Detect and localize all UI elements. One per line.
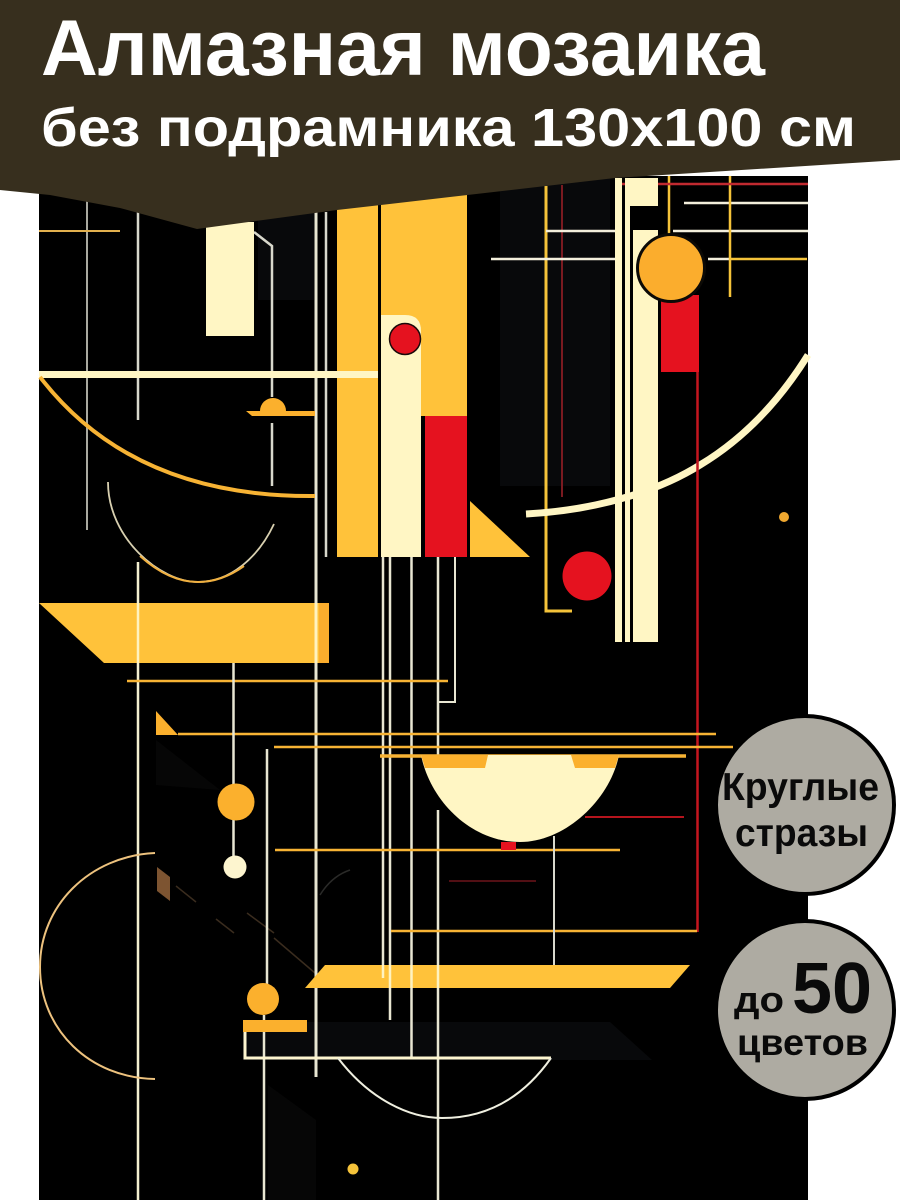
poster black background — [39, 176, 808, 1200]
badge text: до — [734, 979, 784, 1020]
badge: round rhinestones — [716, 716, 894, 894]
badge text: цветов — [737, 1022, 868, 1063]
pendulum line — [232, 663, 235, 860]
overlay verticals across parallelogram — [138, 603, 316, 663]
overlay verticals across bar — [383, 965, 438, 988]
red rectangle — [425, 416, 467, 557]
black divider — [378, 200, 381, 557]
gold line top left — [39, 230, 120, 232]
yellow bottom bar — [305, 965, 690, 988]
gold column right — [381, 195, 467, 416]
thin arc — [108, 482, 274, 582]
dark red thin line — [449, 880, 536, 882]
gold horizontal lines — [127, 681, 733, 931]
yellow line pieces top right — [669, 176, 807, 297]
verticals under the central block — [383, 557, 455, 1200]
header banner — [0, 0, 900, 229]
small red block — [501, 842, 516, 850]
bowl orange trapezoids — [421, 755, 619, 768]
red line behind bowl — [585, 816, 684, 818]
vertical line at lower circle — [264, 749, 267, 1200]
gold triangle — [470, 501, 530, 557]
gold column left — [337, 205, 378, 557]
badge text: стразы — [735, 812, 868, 855]
gold sweeping arc — [40, 377, 315, 496]
faint diagonal lines and brown fragments — [157, 867, 350, 973]
title — [41, 3, 856, 158]
title line 2: без подрамника 130х100 см — [41, 98, 856, 158]
cream long bar — [39, 371, 378, 378]
cream bowl — [421, 755, 619, 842]
dark red line — [561, 185, 563, 497]
thin vertical lines left — [87, 176, 326, 1200]
thin semicircle — [338, 1058, 551, 1118]
red line top — [617, 183, 808, 185]
gold L-shaped line — [546, 186, 572, 611]
cream vertical strips — [615, 178, 658, 642]
cream bracket line — [245, 1032, 551, 1058]
badge text — [722, 766, 879, 855]
thin vertical to bar — [553, 836, 555, 965]
badge text: 50 — [792, 949, 872, 1029]
badge circle — [716, 921, 894, 1099]
horizontal lines top right — [491, 203, 808, 259]
gold parallelogram — [39, 603, 329, 663]
badge: up to 50 colours — [716, 921, 894, 1099]
red circle — [390, 324, 420, 354]
red circle lower — [562, 552, 612, 600]
cream rectangle — [206, 222, 254, 336]
orange circle — [638, 234, 704, 302]
badge text — [734, 949, 872, 1063]
red long line — [696, 372, 699, 932]
badge circle — [716, 716, 894, 894]
orange small bar — [243, 1020, 307, 1032]
lower orange circle — [247, 983, 279, 1015]
cream arc right — [526, 355, 808, 514]
dome on strip — [246, 398, 315, 416]
badge text: Круглые — [722, 766, 879, 809]
orange edge — [319, 603, 329, 663]
title line 1: Алмазная мозаика — [41, 3, 766, 92]
thin gold circle arc — [40, 853, 155, 1079]
gold arc segment — [140, 556, 244, 582]
subtle dark panels — [156, 176, 652, 1200]
small yellow dot — [348, 1164, 358, 1174]
orange dot — [779, 512, 789, 522]
pendulum circles — [218, 784, 254, 878]
poster artwork — [39, 176, 808, 1200]
red block right — [661, 295, 699, 372]
cream central column — [381, 315, 421, 557]
small gold triangle — [156, 711, 178, 735]
